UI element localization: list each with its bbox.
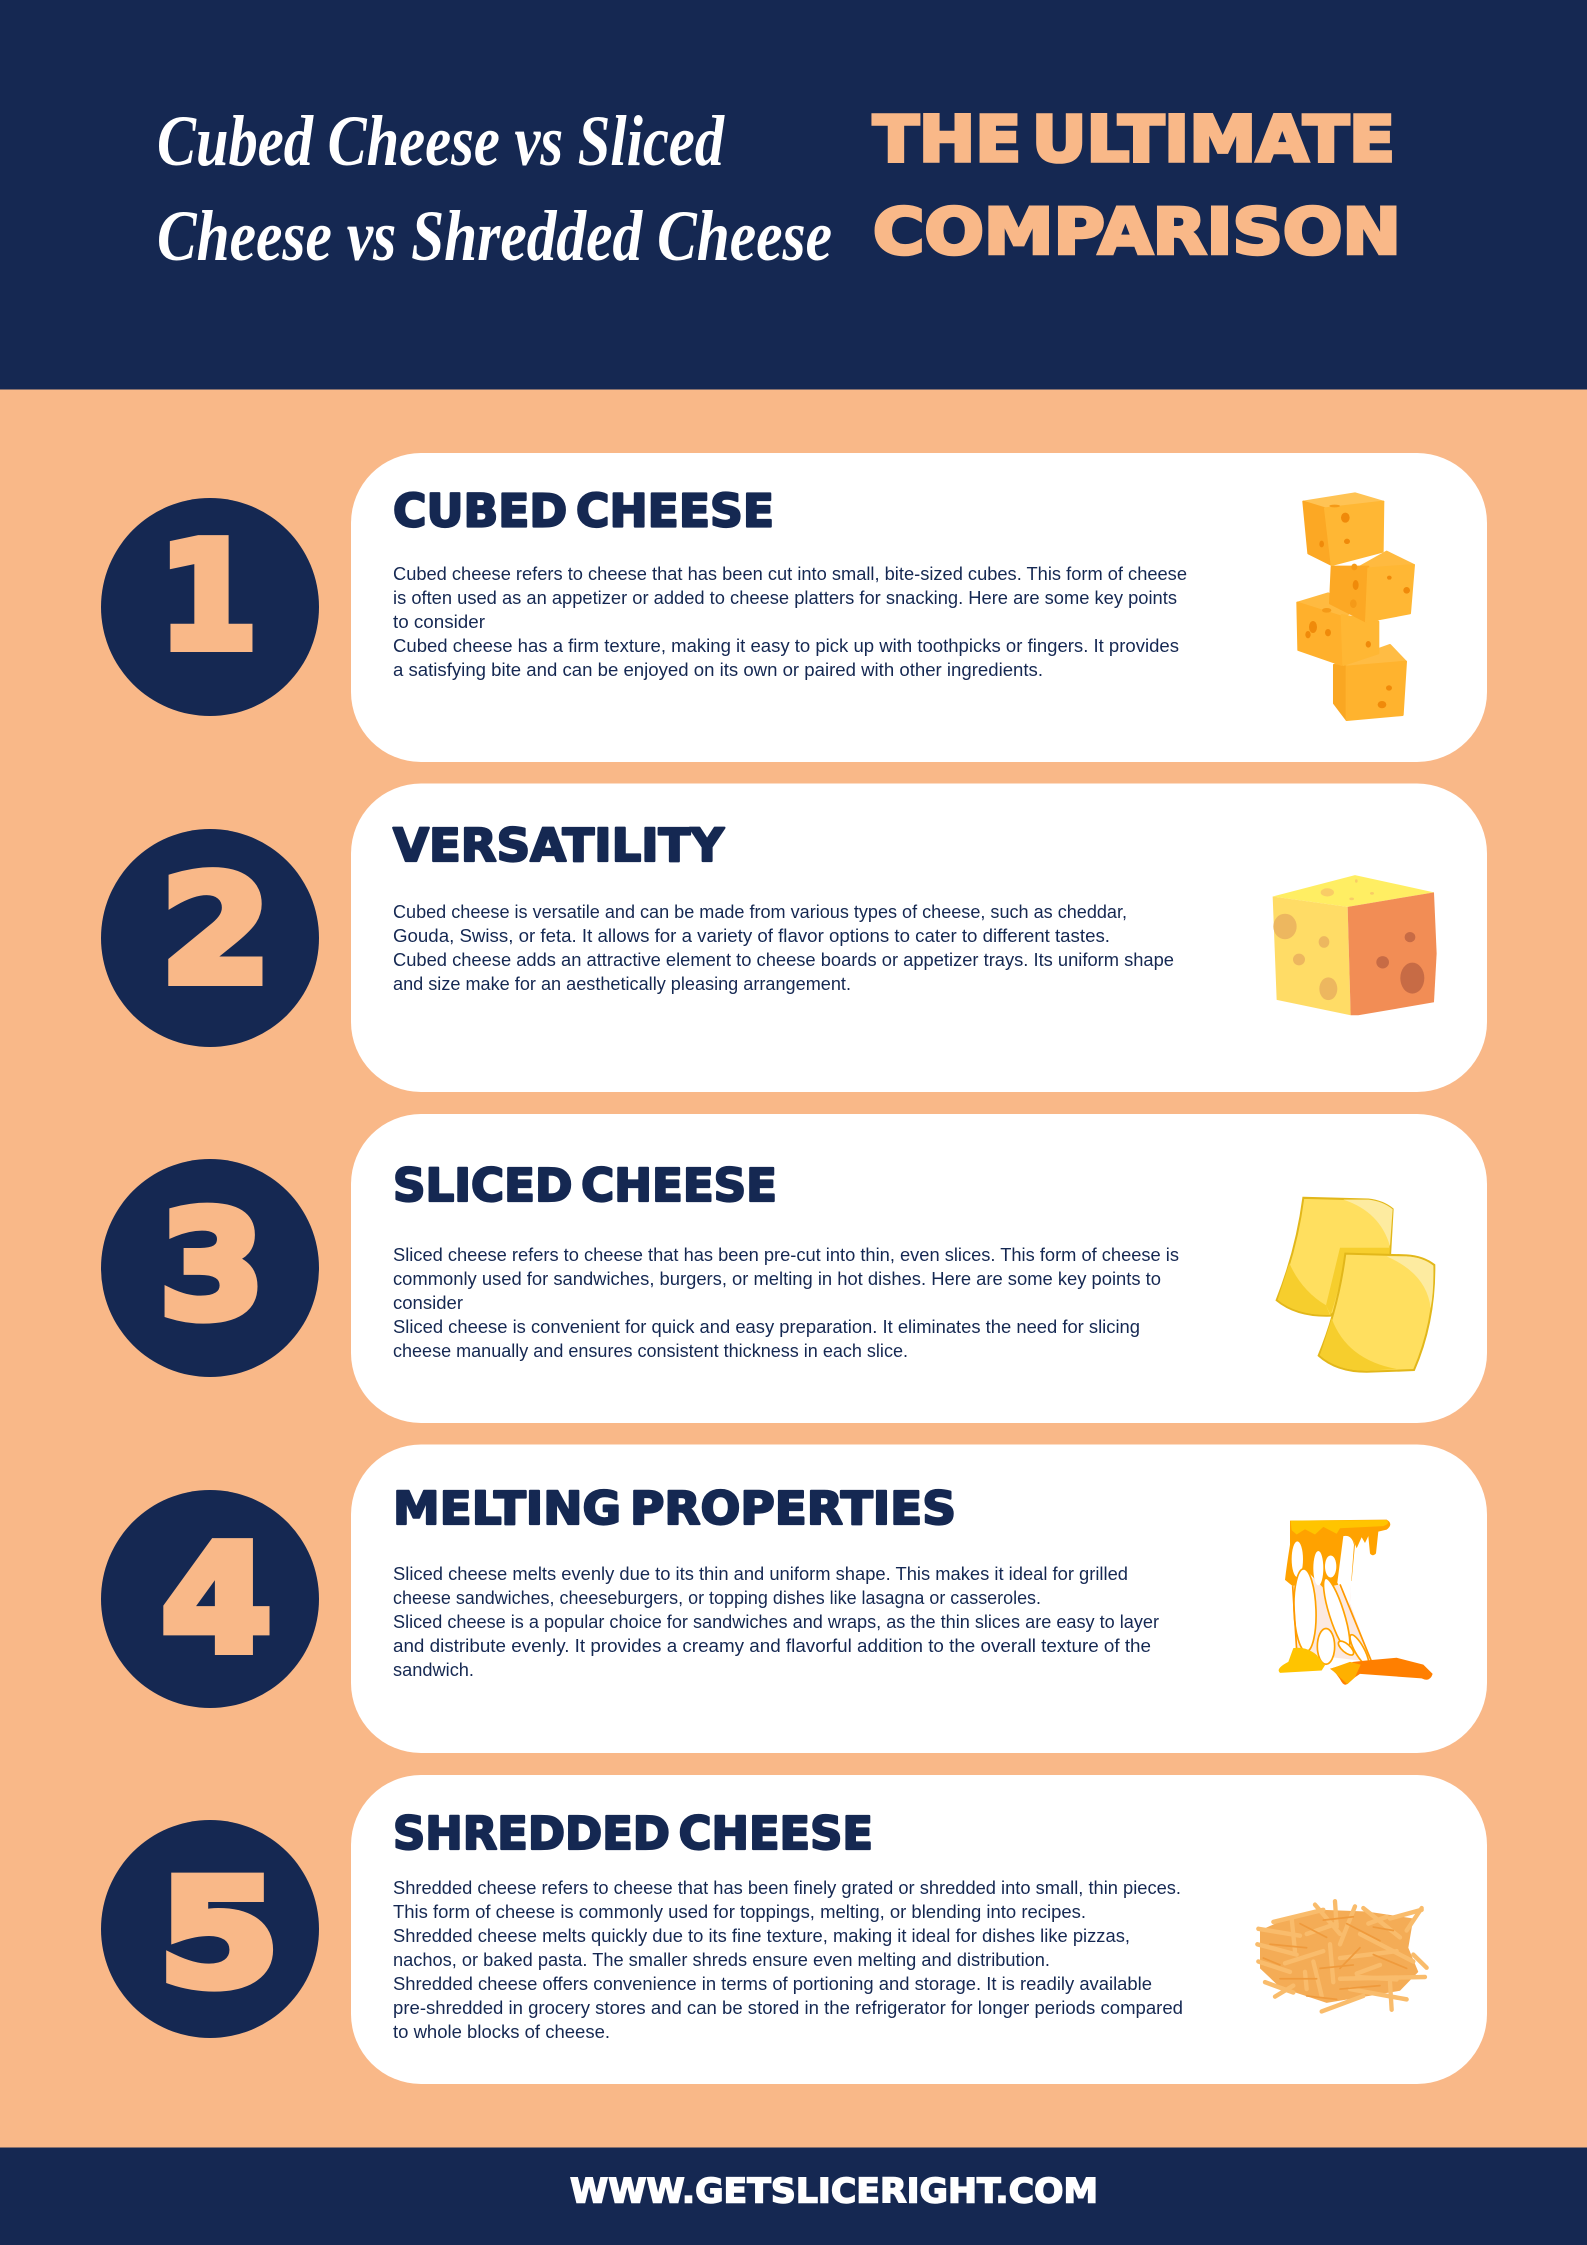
number badge 4: 4 xyxy=(161,1514,272,1686)
text block: versatility: Cubed cheese adds an attractive element to cheese boards or appetizer trays. Its uniform shape xyxy=(393,950,1174,970)
text block: shredded cheese xyxy=(393,1878,1183,2042)
text block: shredded cheese: Shredded cheese refers to cheese that has been finely grated or shredded into small, thin pieces. xyxy=(393,1878,1181,1898)
panel: versatility xyxy=(351,784,1487,1092)
text block: melting properties xyxy=(393,1564,1159,1680)
heading: sliced cheese: SLICED CHEESE xyxy=(393,1159,777,1212)
text block: shredded cheese: pre-shredded in grocery stores and can be stored in the refrigerator for longer periods compared xyxy=(393,1998,1183,2018)
footer url: WWW.GETSLICERIGHT.COM xyxy=(570,2172,1098,2212)
icon: two cheese slices xyxy=(1277,1198,1434,1372)
header band xyxy=(0,0,1587,390)
title: the ultimate comparison: THE ULTIMATE xyxy=(873,103,1395,176)
number badge 1 xyxy=(101,498,319,716)
text block: shredded cheese: This form of cheese is commonly used for toppings, melting, or blending into recipes. xyxy=(393,1902,1086,1922)
title: script subtitle: Cheese vs Shredded Cheese xyxy=(157,196,832,276)
text block: melting properties: Sliced cheese melts evenly due to its thin and uniform shape. This makes it ideal for grilled xyxy=(393,1564,1128,1584)
icon: melted stretchy cheese xyxy=(1279,1520,1433,1685)
text block: melting properties: Sliced cheese is a popular choice for sandwiches and wraps, as the thin slices are easy to layer xyxy=(393,1612,1159,1632)
text block: cubed cheese xyxy=(393,564,1187,680)
panel: sliced cheese xyxy=(351,1114,1487,1423)
icon: shredded cheese pile xyxy=(1257,1901,1427,2011)
heading: shredded cheese: SHREDDED CHEESE xyxy=(393,1807,873,1860)
text block: cubed cheese: a satisfying bite and can be enjoyed on its own or paired with other ingredients. xyxy=(393,660,1043,680)
footer band xyxy=(0,2148,1587,2245)
text block: cubed cheese: Cubed cheese refers to cheese that has been cut into small, bite-sized cubes. This form of cheese xyxy=(393,564,1187,584)
text block: shredded cheese: Shredded cheese offers convenience in terms of portioning and storage. It is readily available xyxy=(393,1974,1152,1994)
text block: versatility: and size make for an aesthetically pleasing arrangement. xyxy=(393,974,851,994)
panel: cubed cheese xyxy=(351,453,1487,762)
number badge 5 xyxy=(101,1820,319,2038)
title: the ultimate comparison: COMPARISON xyxy=(873,196,1401,268)
text block: shredded cheese: Shredded cheese melts quickly due to its fine texture, making it ideal for dishes like pizzas, xyxy=(393,1926,1130,1946)
number badge 3 xyxy=(101,1159,319,1377)
icon: cartoon cheese block xyxy=(1273,875,1437,1015)
text block: versatility: Cubed cheese is versatile and can be made from various types of cheese, such as cheddar, xyxy=(393,902,1127,922)
number badge 2 xyxy=(101,829,319,1047)
text block: sliced cheese: Sliced cheese refers to cheese that has been pre-cut into thin, even slices. This form of cheese is xyxy=(393,1245,1179,1265)
text block: sliced cheese: commonly used for sandwiches, burgers, or melting in hot dishes. Here are some key points to xyxy=(393,1269,1161,1289)
heading: versatility: VERSATILITY xyxy=(393,819,725,872)
text block: melting properties: sandwich. xyxy=(393,1660,474,1680)
number badge 1: 1 xyxy=(158,510,258,682)
text block: cubed cheese: Cubed cheese has a firm texture, making it easy to pick up with toothpicks or fingers. It provides xyxy=(393,636,1179,656)
text block: sliced cheese: consider xyxy=(393,1293,463,1313)
panel: shredded cheese xyxy=(351,1775,1487,2084)
text block: sliced cheese: Sliced cheese is convenient for quick and easy preparation. It eliminates the need for slicing xyxy=(393,1317,1140,1337)
title: script subtitle: Cubed Cheese vs Sliced xyxy=(157,101,725,181)
text block: melting properties: and distribute evenly. It provides a creamy and flavorful addition to the overall texture of the xyxy=(393,1636,1151,1656)
heading: cubed cheese: CUBED CHEESE xyxy=(393,484,774,538)
text block: cubed cheese: is often used as an appetizer or added to cheese platters for snacking. Here are some key points xyxy=(393,588,1177,608)
text block: shredded cheese: nachos, or baked pasta. The smaller shreds ensure even melting and distribution. xyxy=(393,1950,1050,1970)
title: the ultimate comparison xyxy=(873,103,1401,268)
text block: melting properties: cheese sandwiches, cheeseburgers, or topping dishes like lasagna or casseroles. xyxy=(393,1588,1041,1608)
text block: versatility: Gouda, Swiss, or feta. It allows for a variety of flavor options to cater to different tastes. xyxy=(393,926,1110,946)
text block: cubed cheese: to consider xyxy=(393,612,485,632)
number badge 4 xyxy=(101,1490,319,1708)
number badge 5: 5 xyxy=(158,1848,280,2020)
text block: sliced cheese: cheese manually and ensures consistent thickness in each slice. xyxy=(393,1341,908,1361)
text block: shredded cheese: to whole blocks of cheese. xyxy=(393,2022,610,2042)
text block: versatility xyxy=(393,902,1174,994)
number badge 3: 3 xyxy=(159,1180,265,1352)
icon: stacked cheese cubes xyxy=(1297,493,1414,720)
text block: sliced cheese xyxy=(393,1245,1179,1361)
number badge 2: 2 xyxy=(160,844,272,1016)
title: script subtitle xyxy=(157,101,832,276)
heading: melting properties: MELTING PROPERTIES xyxy=(393,1482,956,1535)
panel: melting properties xyxy=(351,1444,1487,1753)
